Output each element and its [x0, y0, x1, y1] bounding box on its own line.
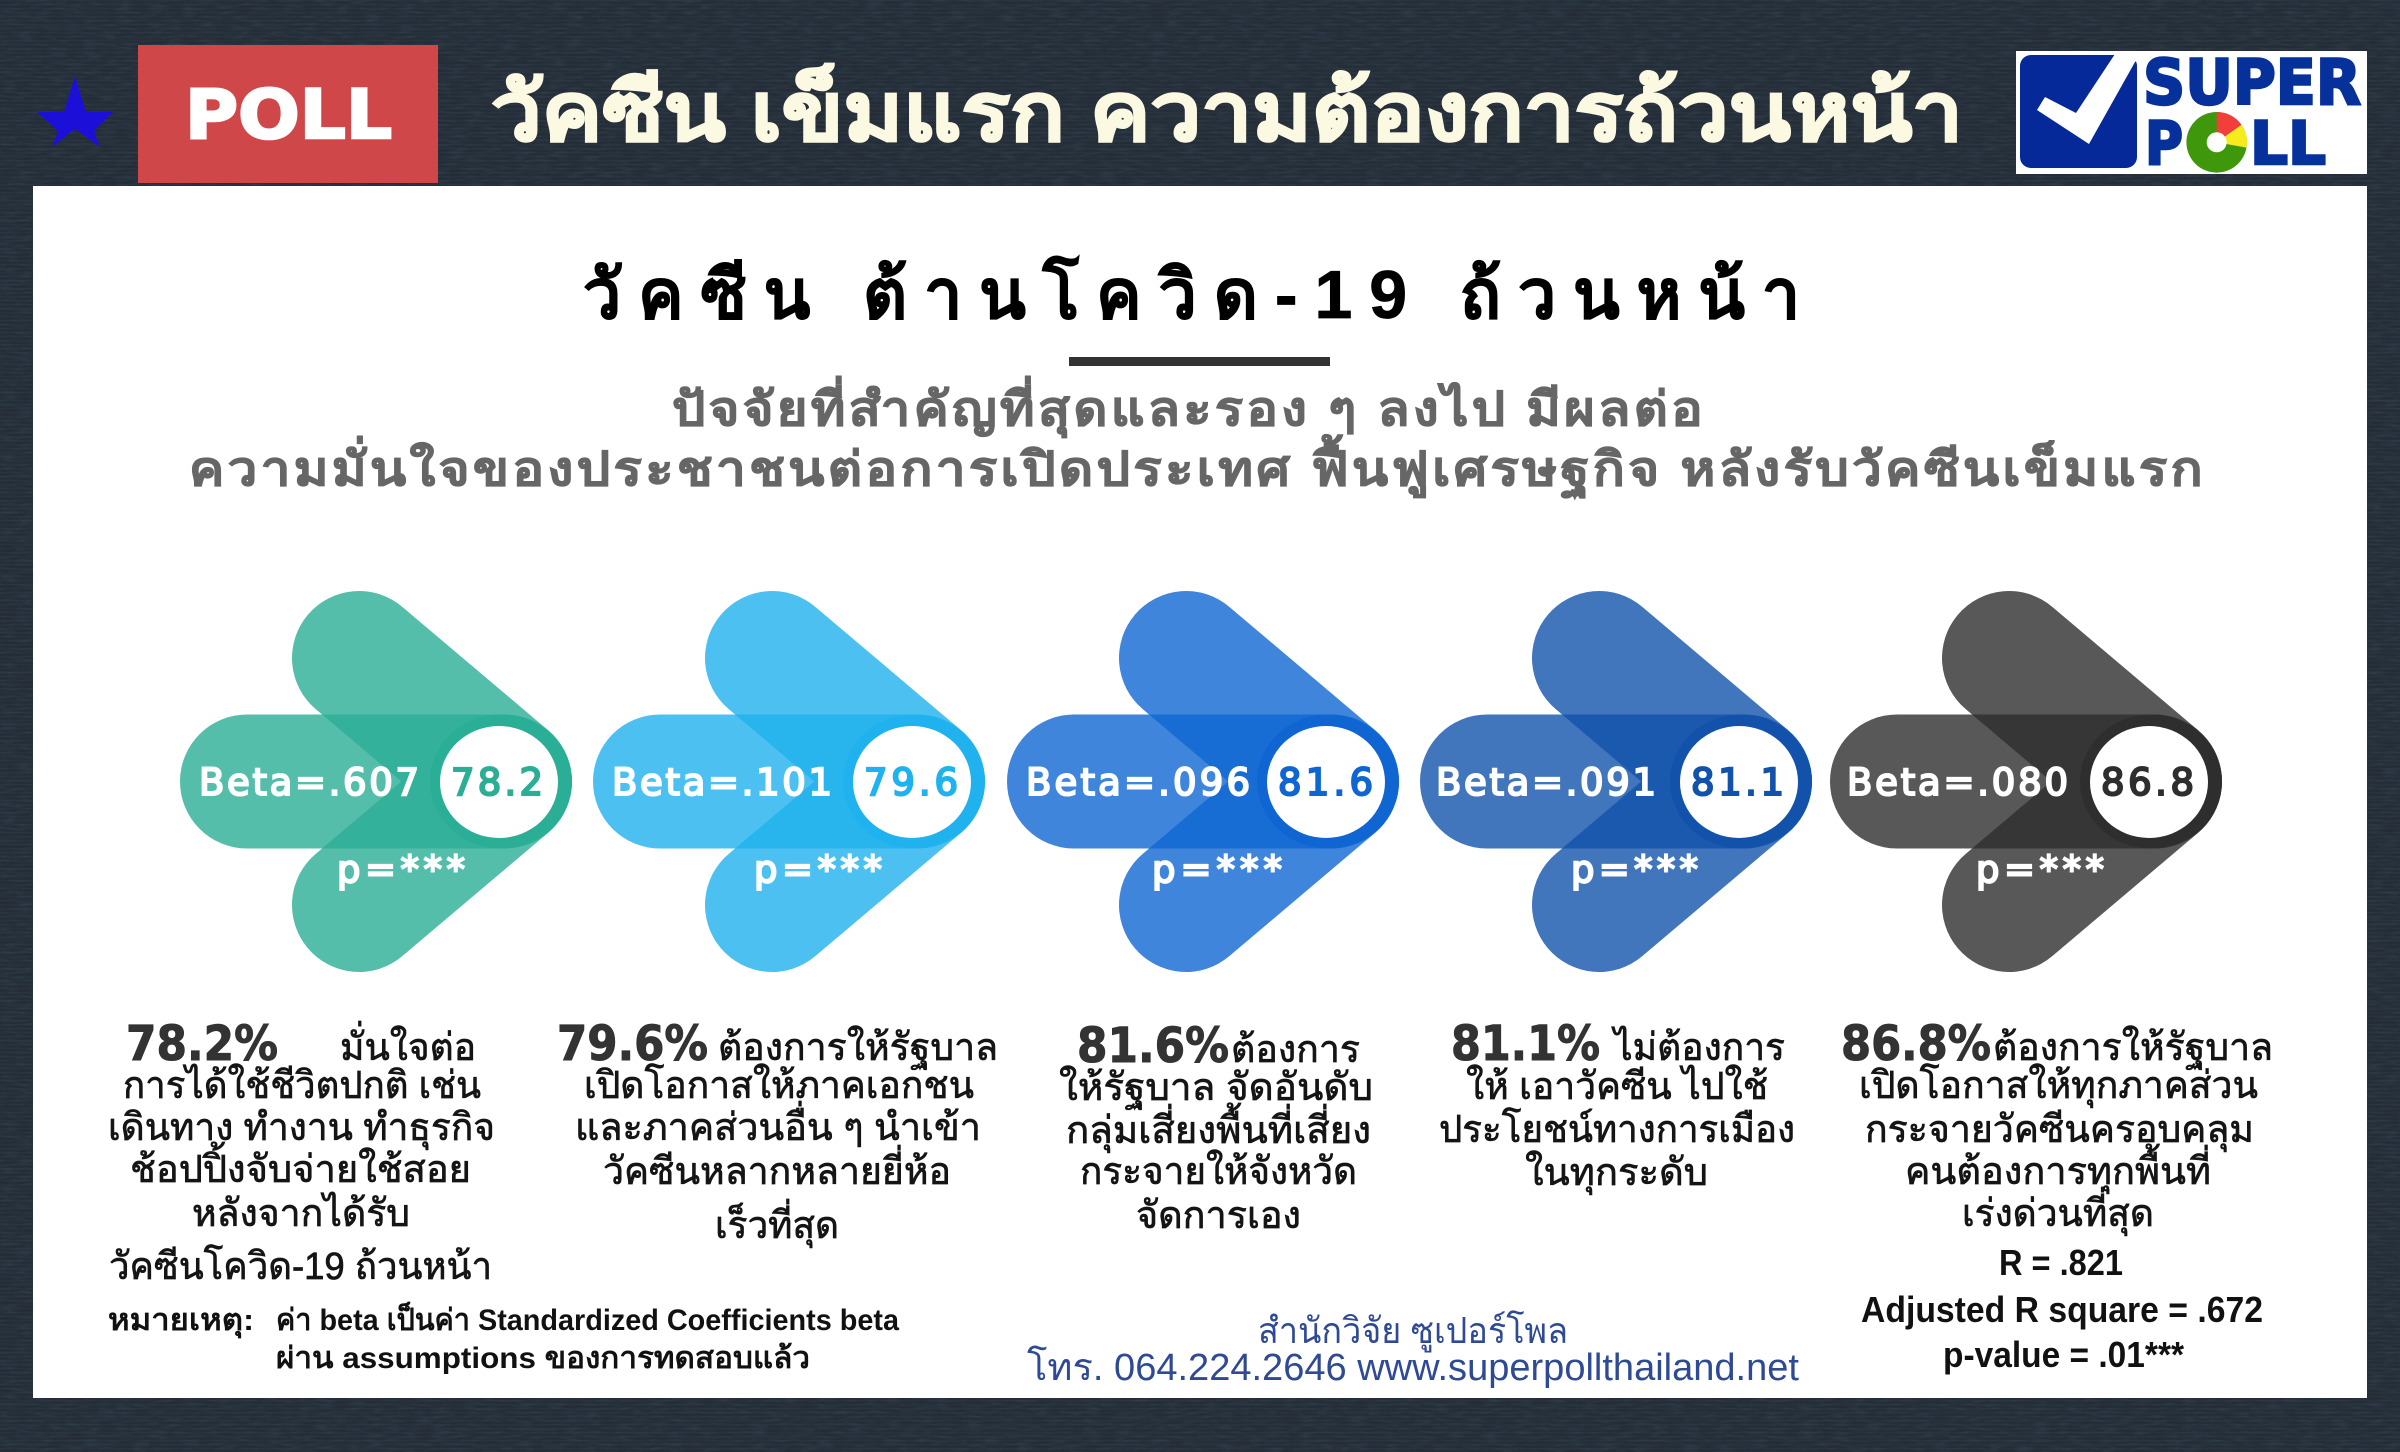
subtitle: ปัจจัยที่สำคัญที่สุดและรอง ๆ ลงไป มีผลต่อ [672, 375, 1706, 438]
text block: 81.6%: กระจายให้จังหวัด [1080, 1150, 1357, 1193]
arrow 5: charcoal beta .080: p=*** [1976, 848, 2104, 891]
arrow 3: blue beta .096: 81.6 [1278, 761, 1373, 804]
text block: 81.6%: ให้รัฐบาล จัดอันดับ [1059, 1066, 1373, 1110]
text block: 79.6%: เปิดโอกาสให้ภาคเอกชน [584, 1063, 974, 1107]
heading: vaccine covid-19: วัคซีน ต้านโควิด-19 ถ้วนหน้า [583, 255, 1800, 333]
text block: 79.6%: วัคซีนหลากหลายยี่ห้อ [603, 1145, 951, 1193]
text block: 81.1%: 81.1% [1451, 1016, 1600, 1072]
footnote: ค่า beta เป็นค่า Standardized Coefficients beta [276, 1301, 899, 1337]
subtitle [189, 375, 2206, 500]
header title: วัคซีน เข็มแรก ความต้องการถ้วนหน้า [491, 64, 1963, 158]
footnote: ผ่าน assumptions ของการทดสอบแล้ว [276, 1342, 810, 1375]
text block: 81.1%: ประโยชน์ทางการเมือง [1439, 1107, 1795, 1151]
source credit: สำนักวิจัย ซูเปอร์โพล [1258, 1310, 1568, 1353]
arrow 4: dark blue beta .091: p=*** [1571, 848, 1698, 891]
arrow 2: sky blue beta .101 [612, 658, 985, 905]
text block: 78.2%: หลังจากได้รับ [192, 1192, 410, 1235]
arrow 4: dark blue beta .091: 81.1 [1691, 761, 1784, 804]
text block: 86.8%: เร่งด่วนที่สุด [1962, 1187, 2154, 1236]
text block: 78.2% [108, 1016, 495, 1288]
arrow 2: sky blue beta .101: Beta=.101 [612, 761, 832, 804]
icon: blue star [37, 76, 113, 147]
arrow 2: sky blue beta .101: p=*** [754, 848, 882, 891]
text block: 79.6%: ต้องการให้รัฐบาล [718, 1026, 998, 1070]
regression statistics: p-value = .01*** [1943, 1334, 2184, 1375]
arrow 5: charcoal beta .080 [1847, 658, 2222, 905]
arrow 4: dark blue beta .091: Beta=.091 [1436, 761, 1656, 804]
logo: super poll: LL [2250, 109, 2326, 179]
text block: 86.8%: ต้องการให้รัฐบาล [1993, 1026, 2273, 1070]
arrow 2: sky blue beta .101: 79.6 [864, 761, 958, 804]
text block: 79.6%: 79.6% [557, 1016, 708, 1072]
text block: 79.6%: เร็วที่สุด [715, 1199, 839, 1248]
text block: 86.8%: เปิดโอกาสให้ทุกภาคส่วน [1859, 1063, 2258, 1108]
text block: 81.6% [1059, 1018, 1373, 1237]
text block: 81.1%: ในทุกระดับ [1525, 1151, 1708, 1195]
text block: 81.1%: ให้ เอาวัคซีน ไปใช้ [1466, 1065, 1768, 1108]
text block: 78.2%: เดินทาง ทำงาน ทำธุรกิจ [108, 1107, 495, 1150]
regression statistics: Adjusted R square = .672 [1861, 1289, 2263, 1330]
arrow 5: charcoal beta .080: Beta=.080 [1847, 761, 2068, 804]
text block: 78.2%: 78.2% [126, 1016, 278, 1072]
logo: super poll: P [2145, 109, 2183, 179]
poll badge: POLL [185, 76, 392, 155]
text block: 81.6%: จัดการเอง [1136, 1195, 1301, 1237]
text block: 78.2%: วัคซีนโควิด-19 ถ้วนหน้า [109, 1244, 492, 1288]
arrow 5: charcoal beta .080: 86.8 [2101, 761, 2194, 804]
arrow 1: teal beta .607 [199, 658, 572, 905]
text block: 86.8%: คนต้องการทุกพื้นที่ [1905, 1143, 2211, 1194]
heading underline [1069, 357, 1330, 366]
text block: 79.6% [557, 1016, 998, 1248]
source credit: โทร. 064.224.2646 www.superpollthailand.net [1027, 1345, 1799, 1389]
arrow 3: blue beta .096: Beta=.096 [1026, 761, 1250, 804]
text block: 78.2%: มั่นใจต่อ [340, 1021, 476, 1069]
arrow 1: teal beta .607: p=*** [337, 848, 465, 891]
regression statistics: R = .821 [1999, 1242, 2123, 1283]
arrow 3: blue beta .096 [1026, 658, 1399, 905]
source credit [1027, 1310, 1799, 1389]
text block: 78.2%: การได้ใช้ชีวิตปกติ เช่น [123, 1064, 481, 1107]
text block: 81.6%: กลุ่มเสี่ยงพื้นที่เสี่ยง [1066, 1102, 1371, 1153]
logo: super poll [2016, 46, 2367, 179]
text block: 78.2%: ช้อปปิ้งจับจ่ายใช้สอย [130, 1141, 471, 1191]
text block: 86.8% [1841, 1016, 2273, 1236]
text block: 79.6%: และภาคส่วนอื่น ๆ นำเข้า [575, 1101, 981, 1149]
text block: 81.6%: ต้องการ [1231, 1029, 1360, 1071]
regression statistics [1861, 1242, 2263, 1375]
text block: 81.1%: ไม่ต้องการ [1611, 1026, 1785, 1069]
arrow 4: dark blue beta .091 [1436, 658, 1812, 905]
arrow 1: teal beta .607: 78.2 [451, 761, 543, 804]
logo: super poll: SUPER [2143, 46, 2361, 119]
text block: 86.8%: 86.8% [1841, 1016, 1991, 1072]
footnote: หมายเหตุ: [108, 1304, 254, 1339]
arrow 3: blue beta .096: p=*** [1152, 848, 1282, 891]
footnote [108, 1301, 899, 1375]
text block: 86.8%: กระจายวัคซีนครอบคลุม [1865, 1109, 2254, 1152]
subtitle: ความมั่นใจของประชาชนต่อการเปิดประเทศ ฟื้นฟูเศรษฐกิจ หลังรับวัคซีนเข็มแรก [189, 434, 2206, 500]
poll badge [138, 45, 438, 183]
text block: 81.6%: 81.6% [1077, 1018, 1229, 1074]
arrow 1: teal beta .607: Beta=.607 [199, 761, 419, 804]
text block: 81.1% [1439, 1016, 1795, 1195]
